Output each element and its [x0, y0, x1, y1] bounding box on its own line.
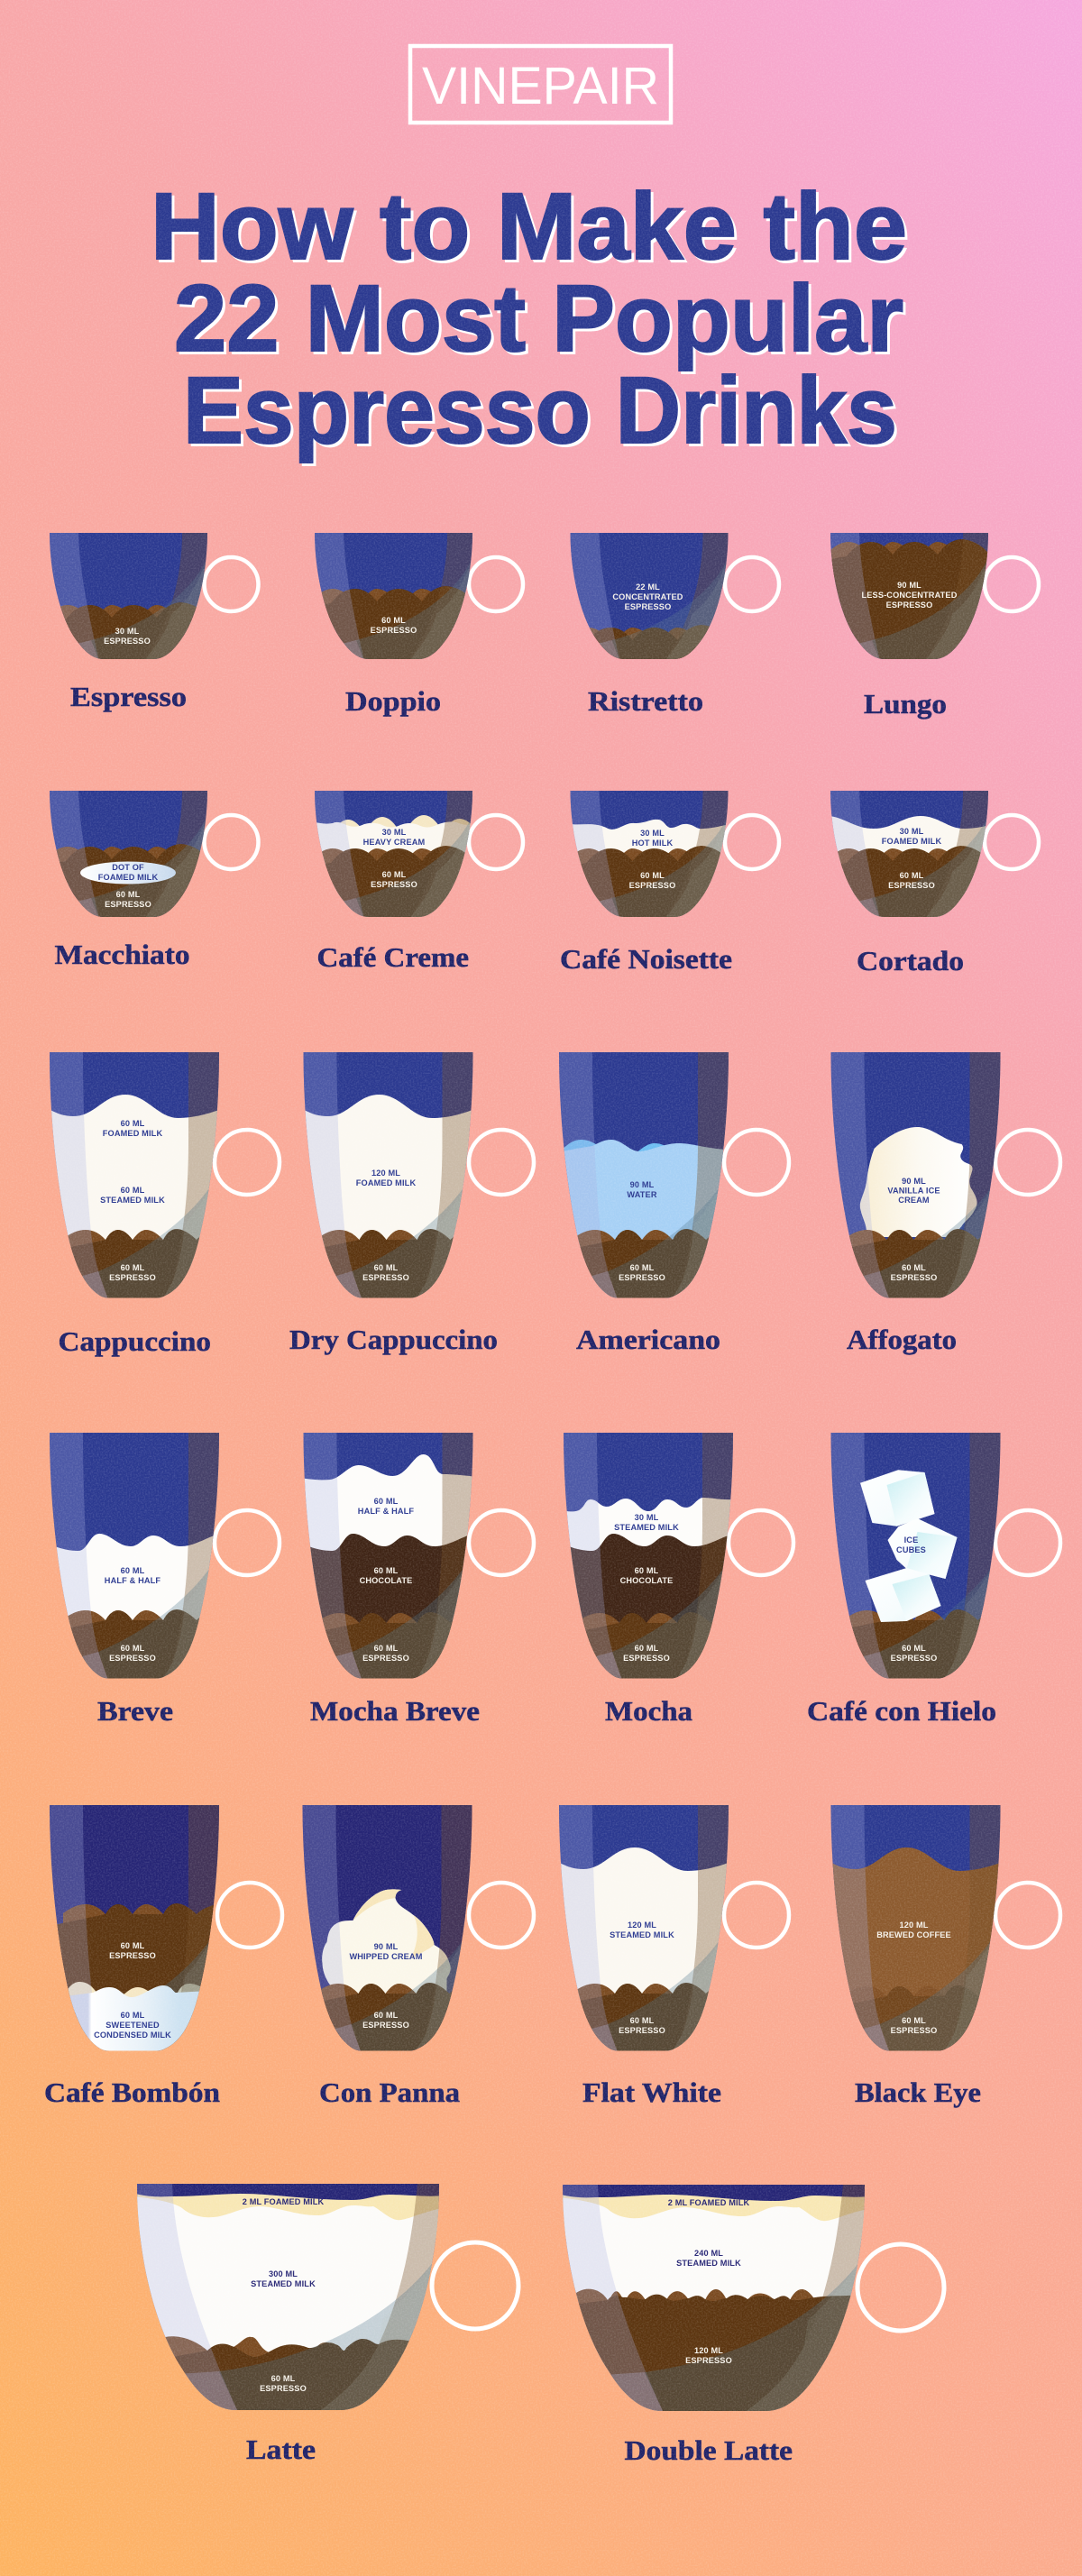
cup: Cappuccino: 60 ML	[121, 1119, 144, 1128]
panel: Flat White	[555, 1803, 789, 2164]
cup: Flat White: ESPRESSO	[619, 2026, 665, 2035]
cup: Dry Cappuccino: ESPRESSO	[362, 1273, 409, 1282]
cup: Latte	[133, 2182, 444, 2418]
cup: Con Panna: 90 ML	[374, 1942, 398, 1951]
drink name: Café Creme	[317, 941, 469, 973]
cup: Doppio: 60 ML	[381, 616, 406, 625]
cup: Black Eye: ESPRESSO	[891, 2026, 937, 2035]
panel: Black Eye	[826, 1803, 1060, 2167]
cup: Flat White: STEAMED MILK	[610, 1930, 674, 1939]
icon: cup handle	[204, 815, 258, 869]
panel: Lungo	[826, 531, 1039, 722]
drink name: Ristretto	[588, 685, 703, 717]
drink name: Lungo	[864, 688, 947, 720]
icon: cup handle	[469, 1130, 534, 1195]
panel: Affogato	[826, 1050, 1060, 1410]
cup: Flat White: 120 ML	[628, 1921, 656, 1930]
cup: Espresso: ESPRESSO	[104, 637, 151, 646]
cup: Mocha Breve	[299, 1431, 478, 1793]
cup: Latte: STEAMED MILK	[251, 2279, 316, 2288]
cup: Breve: 60 ML	[121, 1644, 144, 1653]
drink name: Café con Hielo	[807, 1695, 996, 1727]
cup: Cafe Creme: ESPRESSO	[371, 880, 417, 889]
icon: cup handle	[995, 1510, 1060, 1575]
drink name: Doppio	[345, 685, 441, 717]
cup: Double Latte: 120 ML	[694, 2346, 723, 2355]
drink name: Black Eye	[855, 2076, 981, 2108]
cup: Affogato: VANILLA ICE	[887, 1187, 940, 1196]
cup: Double Latte: 240 ML	[694, 2249, 723, 2258]
cup: Cafe con Hielo: ESPRESSO	[891, 1654, 937, 1663]
cup: Doppio	[315, 533, 472, 659]
icon: cup handle	[432, 2242, 518, 2329]
drink name: Breve	[97, 1695, 173, 1727]
cup: Dry Cappuccino: FOAMED MILK	[356, 1178, 416, 1187]
cup: Mocha: STEAMED MILK	[614, 1523, 679, 1532]
cup: Mocha Breve: ESPRESSO	[362, 1654, 409, 1663]
cup: Lungo: ESPRESSO	[886, 600, 932, 610]
cup: Affogato: 60 ML	[902, 1263, 926, 1272]
drink name: Affogato	[847, 1324, 957, 1355]
cup: Latte: 2 ML FOAMED MILK	[243, 2197, 324, 2206]
cup: Double Latte	[558, 2183, 869, 2419]
cup: Mocha: 60 ML	[635, 1566, 658, 1575]
cup: Cortado	[826, 789, 993, 1029]
panel: Americano	[555, 1050, 789, 1410]
cup: Cappuccino: 60 ML	[121, 1186, 144, 1195]
cup: Cafe Bombon: ESPRESSO	[109, 1951, 156, 1960]
cup: Cappuccino: FOAMED MILK	[103, 1129, 162, 1138]
cup: Americano: 60 ML	[630, 1263, 654, 1272]
panel: Mocha	[559, 1431, 793, 1793]
cup: Cafe Creme: HEAVY CREAM	[363, 838, 426, 847]
cup: Macchiato: FOAMED MILK	[98, 873, 158, 882]
title: Espresso Drinks	[183, 358, 897, 463]
title: 22 Most Popular	[174, 266, 903, 371]
drink name: Americano	[576, 1324, 720, 1355]
cup: Breve: ESPRESSO	[109, 1654, 156, 1663]
cup: Cortado: ESPRESSO	[888, 881, 935, 890]
cup: Cappuccino: 60 ML	[121, 1263, 144, 1272]
drink name: Latte	[246, 2434, 316, 2465]
cup: Espresso: 30 ML	[115, 627, 139, 636]
cup: Cafe Bombon: 60 ML	[121, 1941, 144, 1950]
title: How to Make the	[151, 174, 907, 280]
cup: Mocha Breve: HALF & HALF	[358, 1507, 414, 1516]
cup: Ristretto: CONCENTRATED	[612, 592, 683, 601]
icon: cup handle	[995, 1130, 1060, 1195]
cup: Dry Cappuccino: 120 ML	[371, 1169, 400, 1178]
icon: cup handle	[469, 815, 523, 869]
cup: Latte: 300 ML	[269, 2269, 298, 2278]
cup: Affogato: CREAM	[898, 1196, 930, 1205]
cup: Mocha: 30 ML	[635, 1513, 658, 1522]
cup: Cafe con Hielo: ICE	[904, 1536, 918, 1545]
cup: Cafe Bombon: SWEETENED	[105, 2021, 160, 2030]
cup: Cafe Bombon: 60 ML	[121, 2011, 144, 2020]
cup: Dry Cappuccino: 60 ML	[374, 1263, 398, 1272]
cup: Cortado: 60 ML	[900, 871, 923, 880]
cup: Lungo: LESS-CONCENTRATED	[862, 591, 958, 600]
cup: Cafe Creme	[310, 789, 477, 1029]
drink name: Mocha	[605, 1695, 693, 1727]
icon: ice cubes	[860, 1470, 958, 1622]
cup: Mocha Breve: 60 ML	[374, 1566, 398, 1575]
cup: Macchiato: 60 ML	[116, 890, 140, 899]
title	[151, 174, 907, 463]
cup: Cafe Noisette: 30 ML	[640, 829, 665, 838]
cup: Mocha: 60 ML	[635, 1644, 658, 1653]
panel: Dry Cappuccino	[289, 1050, 534, 1410]
panel: Cafe Creme	[310, 789, 523, 1029]
icon: cup handle	[724, 1883, 789, 1948]
icon: cup handle	[725, 815, 779, 869]
cup: Black Eye	[826, 1803, 1004, 2167]
panel: Ristretto	[570, 533, 781, 710]
cup: Macchiato	[45, 789, 212, 1027]
panel: Cortado	[826, 789, 1039, 1029]
icon: cup handle	[725, 557, 779, 611]
icon: cup handle	[469, 557, 523, 611]
cup: Flat White	[555, 1803, 733, 2164]
cup: Mocha	[559, 1431, 738, 1793]
cup: Cafe Creme: 60 ML	[382, 870, 406, 879]
cup: Con Panna: 60 ML	[374, 2011, 398, 2020]
cup: Ristretto: 22 ML	[636, 582, 660, 591]
cup: Lungo: 90 ML	[897, 581, 922, 590]
icon: cup handle	[217, 1883, 282, 1948]
panel: Doppio	[315, 533, 525, 717]
icon: cup handle	[204, 557, 258, 611]
icon: whipped cream	[322, 1889, 451, 1994]
cup: Macchiato: ESPRESSO	[105, 900, 151, 909]
icon: cup handle	[985, 815, 1039, 869]
cup: Breve	[45, 1431, 224, 1791]
cup: Cafe con Hielo: CUBES	[896, 1545, 926, 1554]
cup: Affogato: ESPRESSO	[891, 1273, 937, 1282]
cup: Cortado: 30 ML	[900, 827, 923, 836]
icon: vanilla ice cream scoop	[860, 1127, 977, 1237]
drink name: Cortado	[857, 945, 964, 976]
cup: Breve: HALF & HALF	[105, 1576, 160, 1585]
cup: Black Eye: 60 ML	[902, 2016, 926, 2025]
cup: Affogato	[826, 1050, 1004, 1410]
cup: Americano	[555, 1050, 733, 1410]
panel: Macchiato	[50, 791, 261, 965]
cup: Cappuccino	[45, 1050, 224, 1410]
cup: Cafe con Hielo	[826, 1431, 1004, 1791]
icon: cup handle	[985, 557, 1039, 611]
drink name: Café Bombón	[44, 2076, 220, 2108]
cup: Double Latte: ESPRESSO	[685, 2356, 732, 2365]
panel: Latte	[133, 2182, 518, 2465]
cup: Cafe con Hielo: 60 ML	[902, 1644, 926, 1653]
icon: cup handle	[469, 1510, 534, 1575]
cup: Americano: 90 ML	[630, 1180, 654, 1189]
icon: cup handle	[469, 1883, 534, 1948]
icon: cup handle	[215, 1130, 280, 1195]
cup: Flat White: 60 ML	[630, 2016, 654, 2025]
cup: Cafe Noisette: 60 ML	[640, 871, 665, 880]
drink name: Macchiato	[54, 939, 189, 970]
panel: Cafe Bombon	[44, 1803, 282, 2108]
cup: Cafe Noisette: HOT MILK	[632, 839, 674, 848]
icon: cup handle	[729, 1510, 793, 1575]
panel: Mocha Breve	[299, 1431, 534, 1793]
panel: Breve	[45, 1431, 280, 1791]
cup: Cortado: FOAMED MILK	[882, 837, 941, 846]
cup: Cappuccino: STEAMED MILK	[100, 1196, 165, 1205]
panel: Double Latte	[558, 2183, 944, 2466]
cup: Espresso	[50, 533, 207, 659]
drink name: Flat White	[582, 2076, 721, 2108]
cup: Breve: 60 ML	[121, 1566, 144, 1575]
cup: Double Latte: 2 ML FOAMED MILK	[668, 2198, 749, 2207]
cup: Con Panna: WHIPPED CREAM	[349, 1952, 423, 1961]
cup: Mocha Breve: 60 ML	[374, 1644, 398, 1653]
cup: Mocha Breve: CHOCOLATE	[360, 1576, 412, 1585]
drink name: Con Panna	[319, 2076, 461, 2108]
cup: Con Panna: ESPRESSO	[362, 2021, 409, 2030]
cup: Cafe Bombon	[45, 1803, 224, 2085]
cup: Dry Cappuccino	[299, 1050, 478, 1410]
cup: Cafe Bombon: CONDENSED MILK	[94, 2031, 171, 2040]
drink name: Espresso	[70, 681, 187, 712]
icon: cup handle	[857, 2244, 944, 2331]
drink name: Double Latte	[624, 2434, 793, 2466]
cup: Macchiato: DOT OF	[112, 863, 144, 872]
cup: Ristretto	[570, 533, 729, 659]
cup: Latte: 60 ML	[271, 2374, 295, 2383]
cup: Con Panna	[298, 1803, 476, 2164]
cup: Black Eye: BREWED COFFEE	[876, 1930, 951, 1939]
cup: Cafe Creme: 30 ML	[382, 828, 406, 837]
logo: VinePair: VINEPAIR	[422, 57, 659, 115]
cup: Cafe Noisette	[566, 789, 732, 1029]
cup: Black Eye: 120 ML	[899, 1921, 929, 1930]
panel: Cafe Noisette	[560, 789, 779, 1029]
drink name: Mocha Breve	[310, 1695, 480, 1727]
cup: Americano: ESPRESSO	[619, 1273, 665, 1282]
panel: Espresso	[50, 533, 261, 712]
cup: Double Latte: STEAMED MILK	[676, 2259, 741, 2268]
cup: Cappuccino: ESPRESSO	[109, 1273, 156, 1282]
drink name: Dry Cappuccino	[289, 1324, 498, 1355]
cup: Mocha: CHOCOLATE	[620, 1576, 673, 1585]
cup: Doppio: ESPRESSO	[371, 626, 417, 635]
drink name: Cappuccino	[58, 1325, 211, 1357]
cup: Ristretto: ESPRESSO	[625, 602, 671, 611]
icon: cup handle	[215, 1510, 280, 1575]
cup: Cafe Noisette: ESPRESSO	[629, 881, 675, 890]
cup: Americano: WATER	[627, 1190, 657, 1199]
cup: Affogato: 90 ML	[902, 1177, 926, 1186]
cup: Mocha Breve: 60 ML	[374, 1497, 398, 1506]
panel: Cafe con Hielo	[807, 1431, 1060, 1791]
cup: Latte: ESPRESSO	[260, 2384, 307, 2393]
panel: Con Panna	[298, 1803, 534, 2164]
cup: Lungo	[830, 533, 988, 659]
drink name: Café Noisette	[560, 943, 732, 975]
panel: Cappuccino	[45, 1050, 280, 1410]
icon: cup handle	[724, 1130, 789, 1195]
icon: cup handle	[995, 1883, 1060, 1948]
cup: Mocha: ESPRESSO	[623, 1654, 670, 1663]
